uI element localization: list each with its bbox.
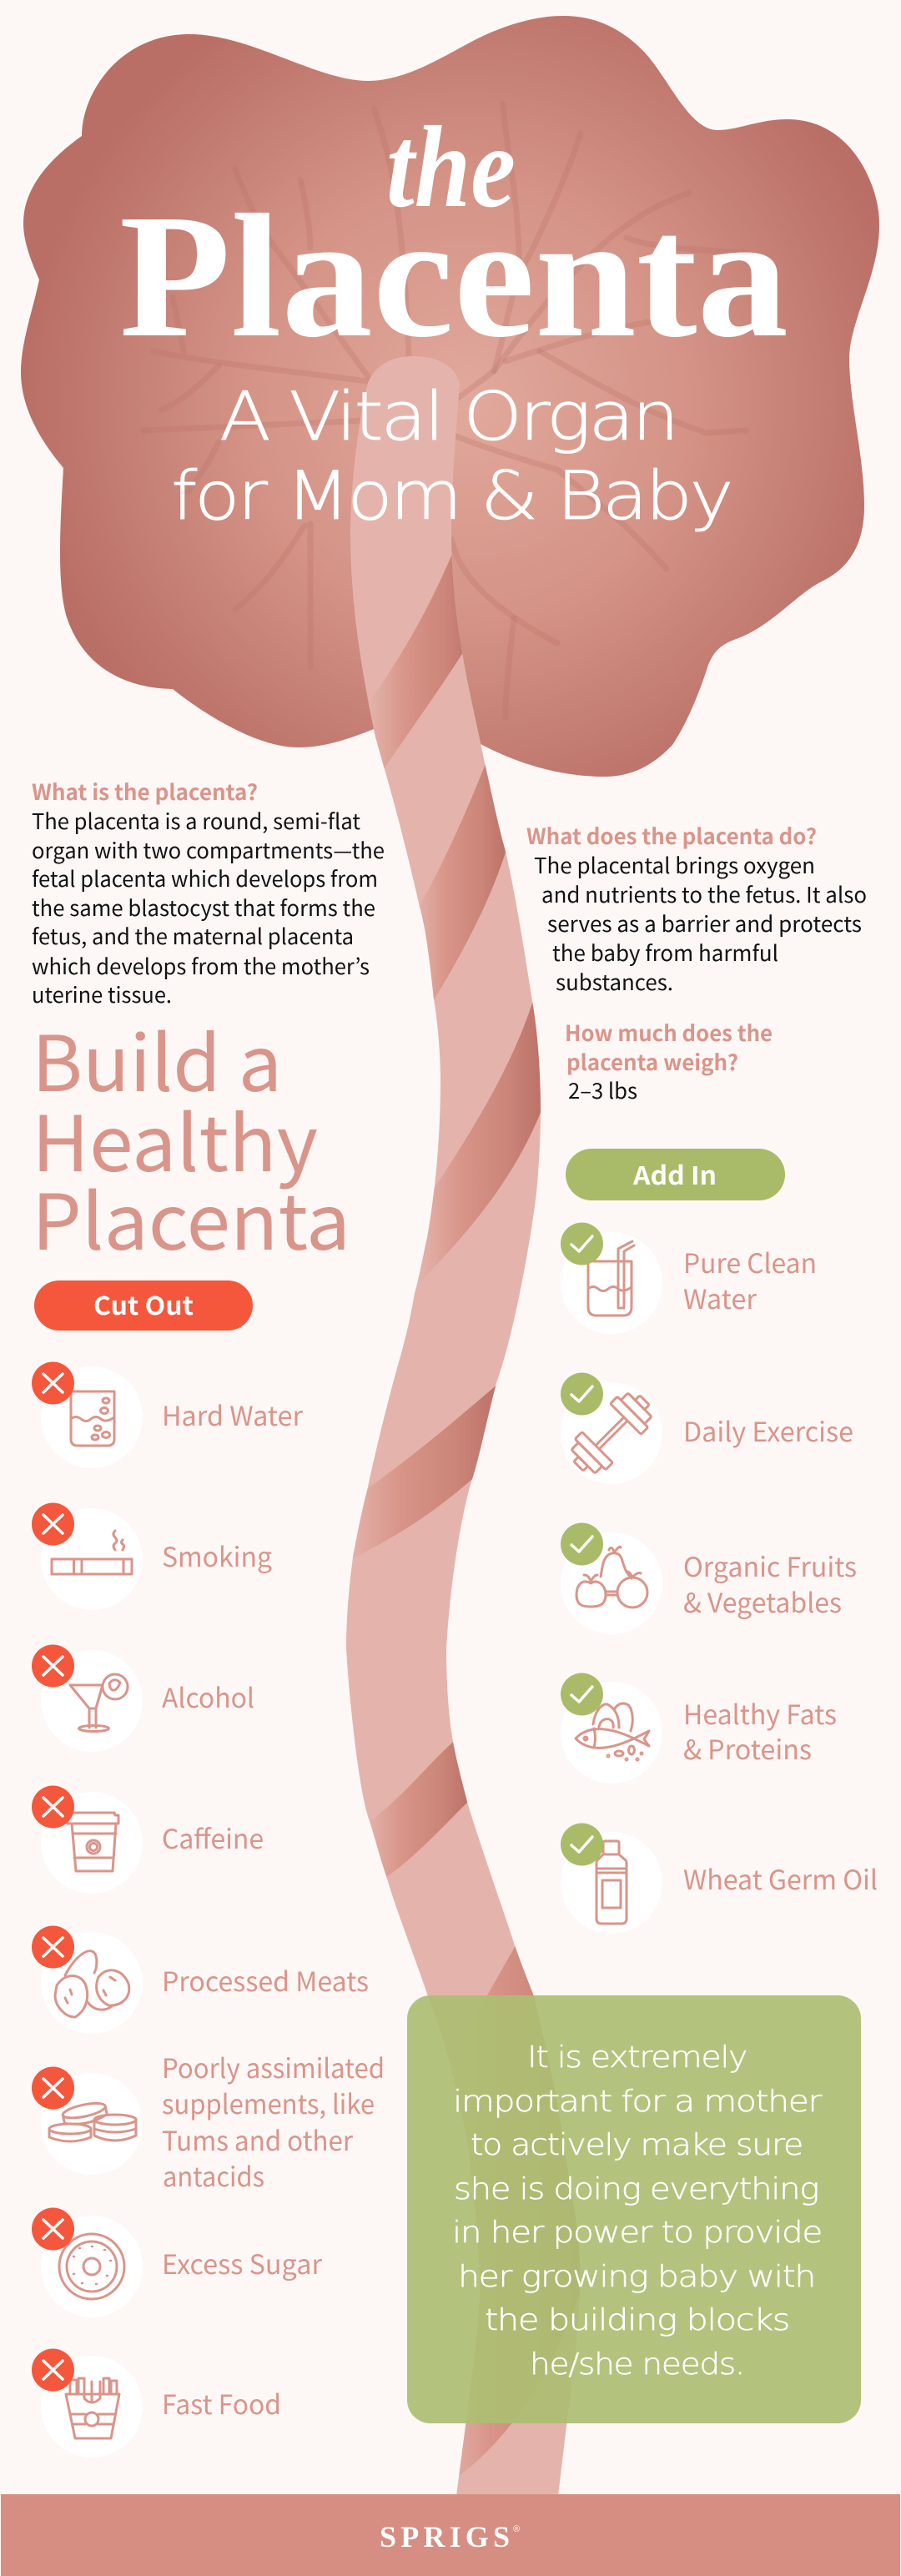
icon: cross badge <box>32 2349 74 2391</box>
item: caffeine: Caffeine <box>162 1819 264 1857</box>
icon: check badge <box>561 1673 603 1715</box>
callout: green quote panel: he/she needs. <box>530 2347 744 2382</box>
text block: what is the placenta: the same blastocyst that forms the <box>32 892 375 923</box>
icon: nuggets <box>55 1951 129 2017</box>
item: daily exercise: Daily Exercise <box>683 1411 853 1450</box>
icon: coffee cup <box>68 1813 118 1871</box>
subtitle line 1: A Vital Organ <box>219 378 677 455</box>
text block: what does the placenta do: What does the placenta do? <box>526 820 817 851</box>
text block: what does the placenta do: serves as a barrier and protects <box>547 908 862 938</box>
icon: dumbbell <box>563 1385 660 1482</box>
footer bar <box>1 2494 900 2576</box>
text block: how much does the placenta weigh: How much does the <box>565 1017 773 1048</box>
item: pure clean water: Pure Clean <box>683 1243 817 1281</box>
item: pure clean water <box>561 1223 817 1334</box>
icon: cross badge <box>32 2067 74 2109</box>
text block: what is the placenta <box>32 776 385 1009</box>
text block: what does the placenta do: The placental brings oxygen <box>534 849 815 880</box>
text block: how much does the placenta weigh: 2–3 lbs <box>568 1074 637 1105</box>
text block: what does the placenta do: the baby from harmful <box>552 937 778 968</box>
icon: glass with straw <box>588 1241 634 1316</box>
icon: check badge <box>561 1373 603 1415</box>
title: Placenta: Placenta <box>119 178 788 374</box>
item: daily exercise <box>561 1373 853 1484</box>
item: wheat germ oil <box>561 1824 878 1934</box>
icon: fries <box>66 2378 119 2438</box>
icon: cigarette <box>52 1531 132 1574</box>
item: poorly assimilated supplements <box>32 2048 385 2195</box>
item: poorly assimilated supplements: Poorly assimilated <box>162 2048 385 2086</box>
text block: what does the placenta do: and nutrients to the fetus. It also <box>541 878 867 909</box>
text block: what is the placenta: fetal placenta which develops from <box>32 863 378 893</box>
item: caffeine <box>32 1785 264 1894</box>
heading: build a healthy placenta: Placenta <box>32 1161 350 1272</box>
item: processed meats: Processed Meats <box>162 1961 369 2000</box>
placenta organ illustration <box>21 16 879 777</box>
item: excess sugar <box>32 2207 323 2317</box>
callout: green quote panel <box>407 1995 861 2423</box>
icon: fruits <box>576 1547 647 1607</box>
item: alcohol: Alcohol <box>162 1678 254 1716</box>
icon: avocado and fish <box>576 1703 649 1760</box>
text block: how much does the placenta weigh: placenta weigh? <box>566 1046 738 1077</box>
icon: glass of hard water <box>71 1391 114 1446</box>
text block: what is the placenta: fetus, and the maternal placenta <box>32 920 354 951</box>
item: pure clean water: Water <box>683 1279 758 1317</box>
icon: cross badge <box>32 2207 74 2251</box>
item: organic fruits and vegetables: & Vegetables <box>683 1582 842 1621</box>
icon: check badge <box>561 1223 603 1265</box>
footer logo: SPRIGS: SPRIGS <box>380 2520 510 2553</box>
heading: build a healthy placenta: Healthy <box>32 1083 318 1194</box>
item: excess sugar: Excess Sugar <box>162 2244 323 2282</box>
item: healthy fats and proteins <box>561 1673 837 1784</box>
text block: what is the placenta: organ with two compartments—the <box>32 834 385 865</box>
text block: how much does the placenta weigh <box>565 1017 773 1105</box>
item: processed meats <box>32 1925 369 2034</box>
heading: build a healthy placenta <box>32 1003 350 1272</box>
pill: add in <box>566 1149 785 1200</box>
item: hard water <box>32 1361 304 1468</box>
callout: green quote panel: her growing baby with <box>458 2260 815 2294</box>
item: wheat germ oil: Wheat Germ Oil <box>683 1859 878 1898</box>
icon: martini <box>70 1674 128 1732</box>
callout: green quote panel: the building blocks <box>485 2303 789 2337</box>
callout: green quote panel: important for a mother <box>453 2085 823 2119</box>
title <box>119 103 788 535</box>
icon: tablets <box>49 2101 136 2141</box>
item: healthy fats and proteins: & Proteins <box>683 1729 812 1768</box>
item: smoking: Smoking <box>162 1537 272 1575</box>
icon: check badge <box>561 1523 603 1565</box>
item: poorly assimilated supplements: Tums and other <box>162 2121 354 2159</box>
item: smoking <box>32 1503 272 1610</box>
callout: green quote panel: in her power to provide <box>452 2216 822 2250</box>
text block: what does the placenta do: substances. <box>556 966 673 997</box>
item: organic fruits and vegetables <box>561 1523 857 1634</box>
umbilical cord <box>346 356 592 2496</box>
item: organic fruits and vegetables: Organic Fruits <box>683 1547 857 1585</box>
pill: cut out: Cut Out <box>93 1285 194 1322</box>
item: fast food: Fast Food <box>162 2384 281 2423</box>
callout: green quote panel: It is extremely <box>527 2040 747 2075</box>
icon: donut <box>59 2234 124 2299</box>
footer bar: ® <box>513 2524 520 2534</box>
text block: what is the placenta: uterine tissue. <box>32 979 172 1009</box>
subtitle line 2: for Mom & Baby <box>171 457 731 535</box>
icon: check badge <box>561 1824 603 1865</box>
item: fast food <box>32 2349 281 2458</box>
title: the: the <box>386 103 516 232</box>
text block: what is the placenta: What is the placenta? <box>32 776 258 807</box>
item: poorly assimilated supplements: supplements, like <box>162 2084 375 2122</box>
item: hard water: Hard Water <box>162 1396 304 1434</box>
icon: cross badge <box>32 1785 74 1829</box>
heading: build a healthy placenta: Build a <box>32 1003 282 1114</box>
text block: what is the placenta: The placenta is a round, semi-flat <box>32 805 360 836</box>
callout: green quote panel: to actively make sure <box>471 2128 803 2162</box>
icon: cross badge <box>32 1361 74 1405</box>
icon: cross badge <box>32 1925 74 1969</box>
pill: add in: Add In <box>632 1155 717 1192</box>
text block: what is the placenta: which develops from the mother’s <box>32 950 370 981</box>
text block: what does the placenta do <box>526 820 867 997</box>
icon: cross badge <box>32 1645 74 1687</box>
item: healthy fats and proteins: Healthy Fats <box>683 1694 837 1733</box>
item: poorly assimilated supplements: antacids <box>163 2156 264 2195</box>
pill: cut out <box>34 1280 253 1331</box>
icon: cross badge <box>32 1503 74 1545</box>
item: alcohol <box>32 1645 254 1752</box>
callout: green quote panel: she is doing everything <box>454 2172 818 2206</box>
icon: oil bottle <box>596 1841 627 1924</box>
